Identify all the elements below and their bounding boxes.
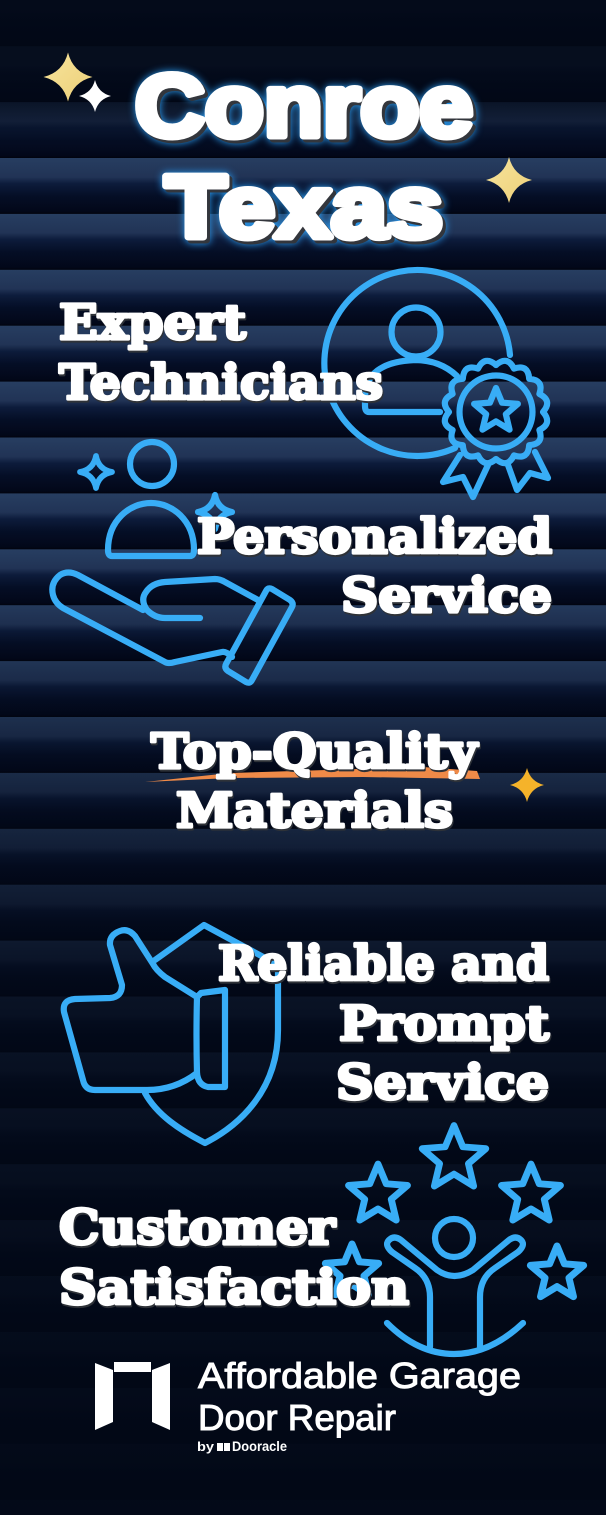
title <box>135 56 473 256</box>
heading: Expert Technicians: Expert <box>59 295 246 351</box>
icon: happy customer with five stars <box>325 1126 584 1354</box>
logo: company name: Door Repair <box>198 1397 396 1438</box>
heading: Expert Technicians <box>59 295 383 411</box>
logo: door mark <box>95 1362 170 1430</box>
heading: Reliable and Prompt Service <box>218 936 549 1111</box>
icon: white sparkle top left <box>79 80 111 112</box>
heading: Top-Quality Materials: Materials <box>176 783 453 839</box>
orange brush underline <box>145 767 480 782</box>
logo: company name: Affordable Garage <box>198 1355 521 1396</box>
logo: by Dooracle: by <box>197 1439 215 1454</box>
heading: Reliable and Prompt Service: Reliable and <box>218 936 549 992</box>
heading: Customer Satisfaction: Customer <box>59 1200 336 1256</box>
heading: Top-Quality Materials <box>151 724 479 839</box>
logo: by Dooracle <box>197 1439 287 1454</box>
logo: by Dooracle: Dooracle <box>232 1439 287 1454</box>
title: Conroe <box>135 56 473 155</box>
heading: Reliable and Prompt Service: Service <box>336 1055 549 1111</box>
title: Texas <box>165 157 443 256</box>
heading: Customer Satisfaction: Satisfaction <box>59 1260 409 1316</box>
heading: Personalized Service: Service <box>341 568 552 624</box>
heading: Personalized Service <box>197 509 552 624</box>
heading: Customer Satisfaction <box>59 1200 409 1316</box>
heading: Top-Quality Materials: Top-Quality <box>151 724 479 780</box>
icon: expert technician with award badge <box>324 270 548 497</box>
icon: person above open hand <box>52 442 293 683</box>
icon: orange gold sparkle <box>510 768 544 802</box>
logo: company name <box>198 1355 521 1438</box>
heading: Expert Technicians: Technicians <box>59 355 383 411</box>
icon: thumbs up with shield <box>64 925 278 1143</box>
icon: gold sparkle top right <box>486 157 532 203</box>
heading: Personalized Service: Personalized <box>197 509 552 565</box>
heading: Reliable and Prompt Service: Prompt <box>339 996 549 1052</box>
icon: gold sparkle top left <box>44 52 92 102</box>
